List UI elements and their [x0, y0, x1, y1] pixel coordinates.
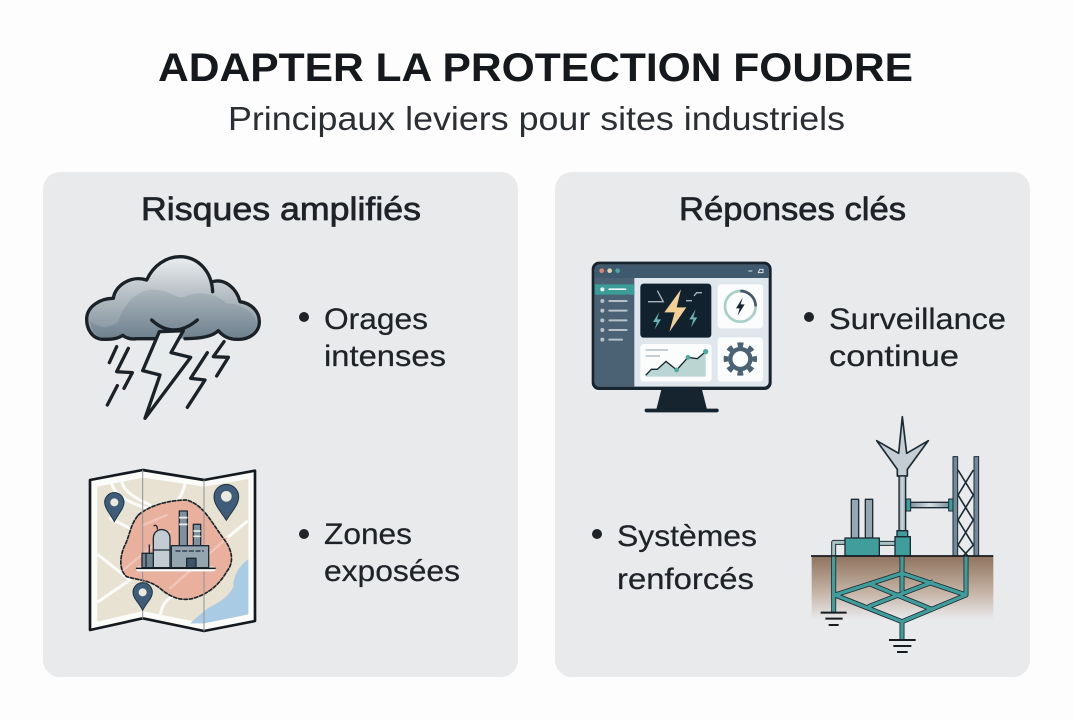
title: ADAPTER LA PROTECTION FOUDRE	[158, 46, 913, 90]
panel heading: risques: Risques amplifiés	[141, 191, 421, 227]
icon: storm cloud	[87, 257, 259, 418]
pins	[105, 484, 239, 610]
panel: risques amplifiés	[43, 172, 518, 677]
bullet: surveillance continue	[804, 303, 1006, 373]
icon: risk map	[90, 470, 255, 631]
subtitle: Principaux leviers pour sites industriels	[228, 100, 845, 137]
bullet: systèmes renforcés: Systèmes	[617, 520, 757, 553]
bullet: systèmes renforcés: renforcés	[617, 563, 754, 596]
bullet: surveillance continue: Surveillance	[829, 303, 1006, 336]
bullet: zones exposées: Zones	[324, 518, 412, 551]
bullet: zones exposées: exposées	[324, 555, 460, 588]
bullet: orages intenses	[299, 303, 446, 373]
bullet: surveillance continue: continue	[829, 340, 959, 373]
bullet: systèmes renforcés	[592, 520, 757, 596]
factory	[137, 511, 215, 569]
panel: réponses clés	[555, 172, 1030, 677]
bullet: zones exposées	[299, 518, 460, 588]
bullet: orages intenses: Orages	[324, 303, 428, 336]
icon: lightning rod and earthing grid	[811, 417, 993, 652]
panel heading: réponses: Réponses clés	[679, 191, 906, 227]
icon: monitoring screen	[592, 262, 772, 412]
bullet: orages intenses: intenses	[324, 340, 446, 373]
